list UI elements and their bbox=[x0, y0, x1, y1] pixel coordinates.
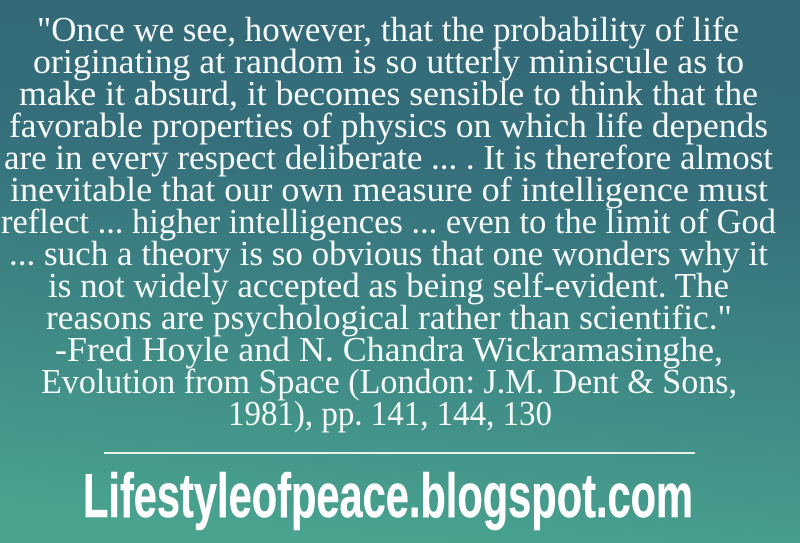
quote text block: ... such a theory is so obvious that one wonders why it bbox=[9, 235, 768, 273]
quote text block bbox=[1, 11, 776, 337]
quote text block: make it absurd, it becomes sensible to think that the bbox=[19, 75, 758, 113]
quote text block: reflect ... higher intelligences ... even to the limit of God bbox=[1, 203, 776, 241]
quote text block: inevitable that our own measure of intelligence must bbox=[10, 171, 768, 209]
quote text block: are in every respect deliberate ... . It is therefore almost bbox=[4, 139, 773, 177]
quote text block: reasons are psychological rather than scientific." bbox=[46, 299, 732, 337]
attribution text block: Evolution from Space (London: J.M. Dent & Sons, bbox=[41, 363, 737, 401]
quote text block: originating at random is so utterly miniscule as to bbox=[33, 43, 744, 81]
attribution text block: -Fred Hoyle and N. Chandra Wickramasinghe, bbox=[55, 331, 723, 369]
quote text block: favorable properties of physics on which life depends bbox=[9, 107, 768, 145]
attribution text block bbox=[41, 331, 737, 433]
quote text block: is not widely accepted as being self-evident. The bbox=[48, 267, 729, 305]
attribution text block: 1981), pp. 141, 144, 130 bbox=[228, 395, 552, 433]
divider line bbox=[104, 452, 695, 454]
quote text block: "Once we see, however, that the probability of life bbox=[37, 11, 739, 49]
